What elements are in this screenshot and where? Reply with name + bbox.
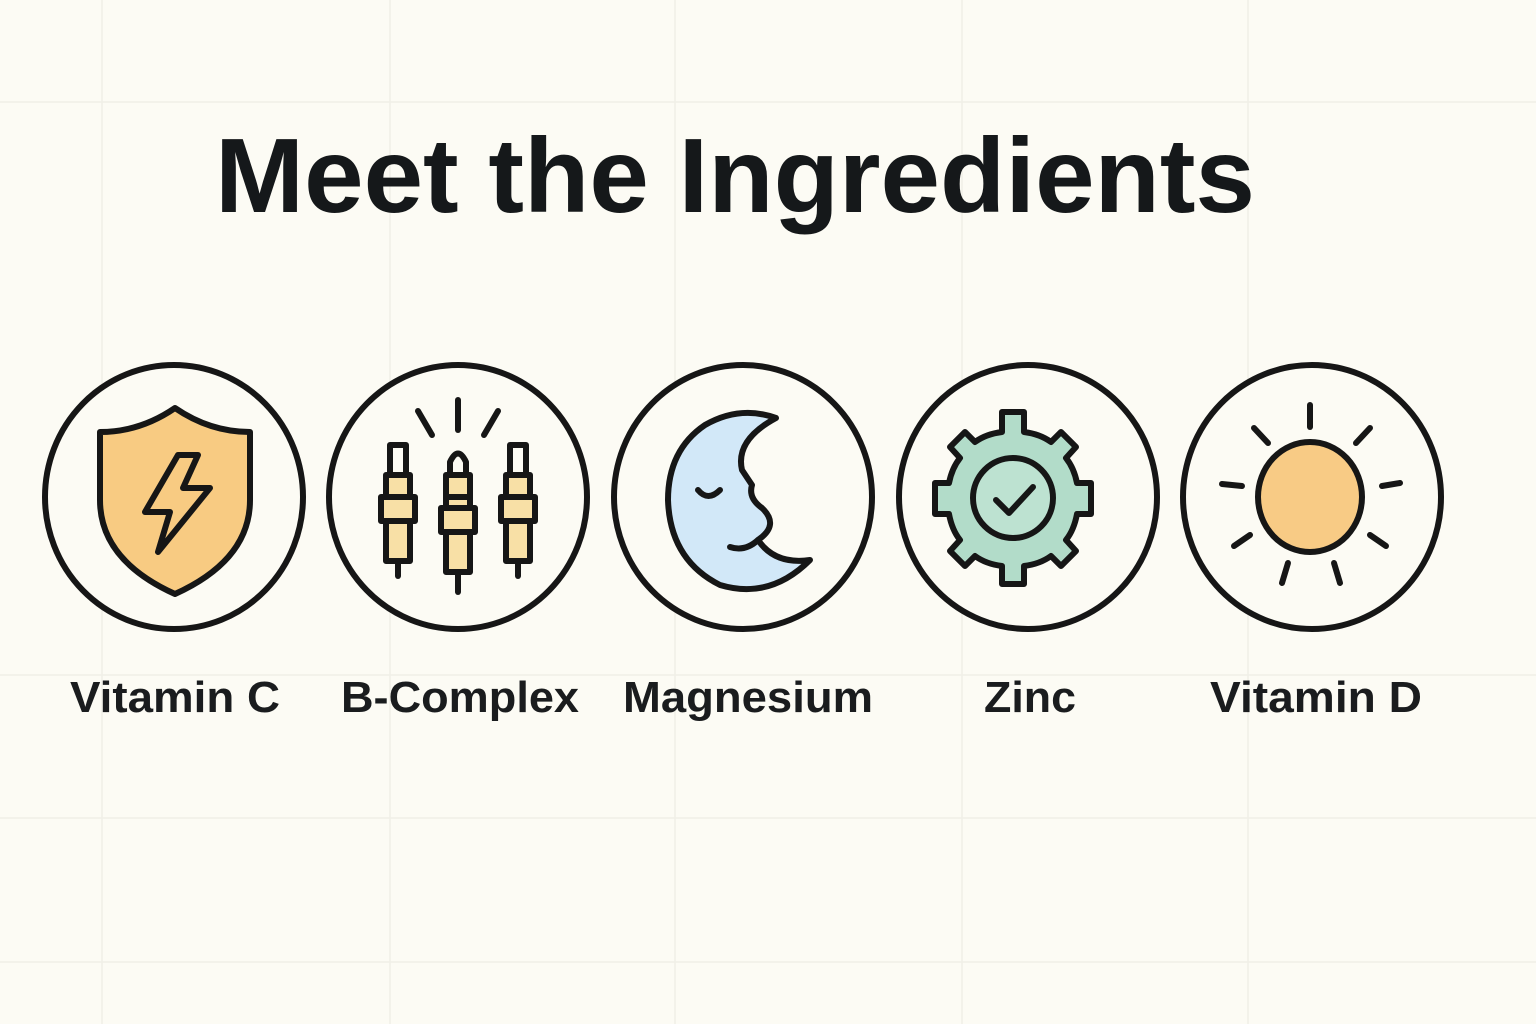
icon: Vitamin C shield (45, 365, 303, 629)
label: Zinc: Zinc (984, 673, 1076, 722)
label: Magnesium: Magnesium (623, 673, 873, 722)
labels (70, 673, 1422, 722)
title: Meet the Ingredients (215, 117, 1255, 235)
label: Vitamin D: Vitamin D (1210, 673, 1422, 722)
label: B-Complex: B-Complex (341, 673, 580, 722)
icon: B-Complex (329, 365, 587, 629)
label: Vitamin C: Vitamin C (70, 673, 280, 722)
icon: Vitamin D sun (1183, 365, 1441, 629)
icon: Zinc gear (899, 365, 1157, 629)
icon: Magnesium moon (614, 365, 872, 629)
